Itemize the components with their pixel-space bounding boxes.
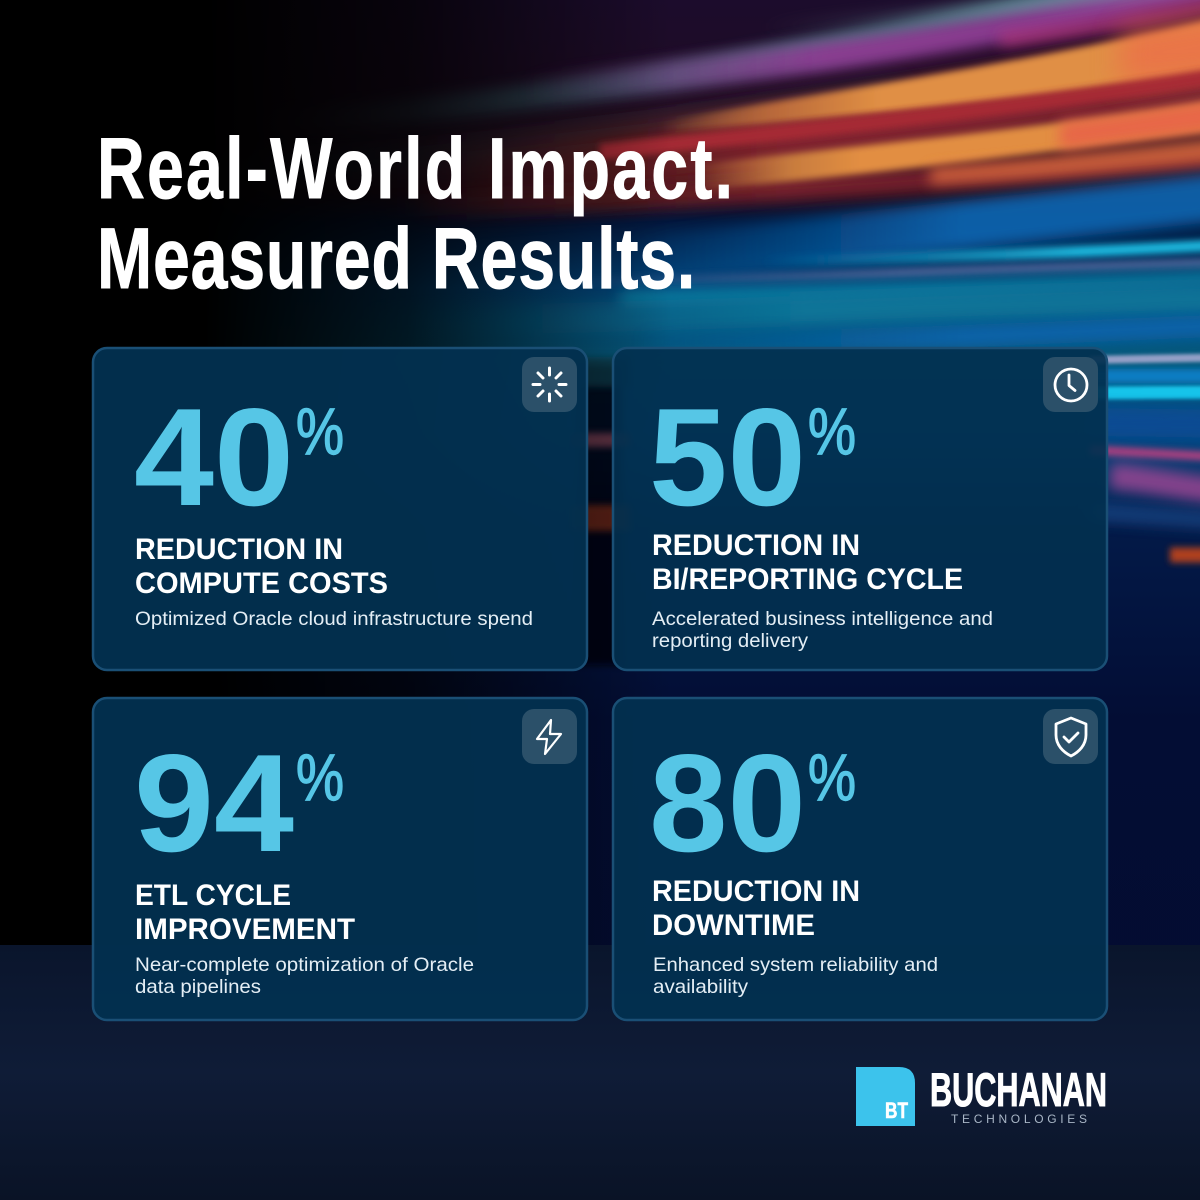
panel: ETL cycle <box>93 698 587 1020</box>
stat: 50%: % <box>808 394 856 468</box>
heading: DOWNTIME <box>652 909 815 942</box>
title: Measured Results. <box>97 212 695 307</box>
panel: compute costs <box>93 348 587 670</box>
logo: Buchanan Technologies <box>856 1063 1107 1126</box>
heading: IMPROVEMENT <box>135 913 355 946</box>
heading <box>135 879 355 946</box>
stat: 50%: 50 <box>649 380 806 535</box>
title <box>97 122 733 307</box>
heading: REDUCTION IN <box>135 533 343 566</box>
heading: BI/REPORTING CYCLE <box>652 563 963 596</box>
heading: ETL CYCLE <box>135 879 291 912</box>
heading <box>652 529 963 596</box>
description: Accelerated business intelligence and <box>652 608 993 630</box>
description: Enhanced system reliability and <box>653 954 938 976</box>
description <box>135 954 474 998</box>
wordmark: BUCHANAN <box>930 1063 1107 1116</box>
icon: clock <box>1043 357 1098 412</box>
heading <box>652 875 860 942</box>
icon: shield check <box>1043 709 1098 764</box>
wordmark: TECHNOLOGIES <box>951 1112 1087 1126</box>
panel: downtime <box>613 698 1107 1020</box>
icon: lightning bolt <box>522 709 577 764</box>
logo mark: BT <box>885 1098 908 1123</box>
wordmark <box>930 1063 1107 1126</box>
stat: 94%: 94 <box>134 726 294 881</box>
stat: 80%: 80 <box>649 726 806 881</box>
description: reporting delivery <box>652 630 808 652</box>
heading: REDUCTION IN <box>652 875 860 908</box>
panel: BI reporting cycle <box>613 348 1107 670</box>
heading: COMPUTE COSTS <box>135 567 388 600</box>
stat: 40%: 40 <box>134 380 294 535</box>
stat: 40%: % <box>296 394 344 468</box>
description <box>653 954 938 998</box>
heading <box>135 533 388 600</box>
stat: 80%: % <box>808 740 856 814</box>
icon: loading spinner <box>522 357 577 412</box>
title: Real-World Impact. <box>97 122 733 217</box>
heading: REDUCTION IN <box>652 529 860 562</box>
description: Optimized Oracle cloud infrastructure spend <box>135 608 533 630</box>
stat: 94%: % <box>296 740 344 814</box>
description: data pipelines <box>135 976 261 998</box>
description: availability <box>653 976 748 998</box>
description <box>652 608 993 652</box>
description: Near-complete optimization of Oracle <box>135 954 474 976</box>
logo mark <box>856 1067 915 1126</box>
